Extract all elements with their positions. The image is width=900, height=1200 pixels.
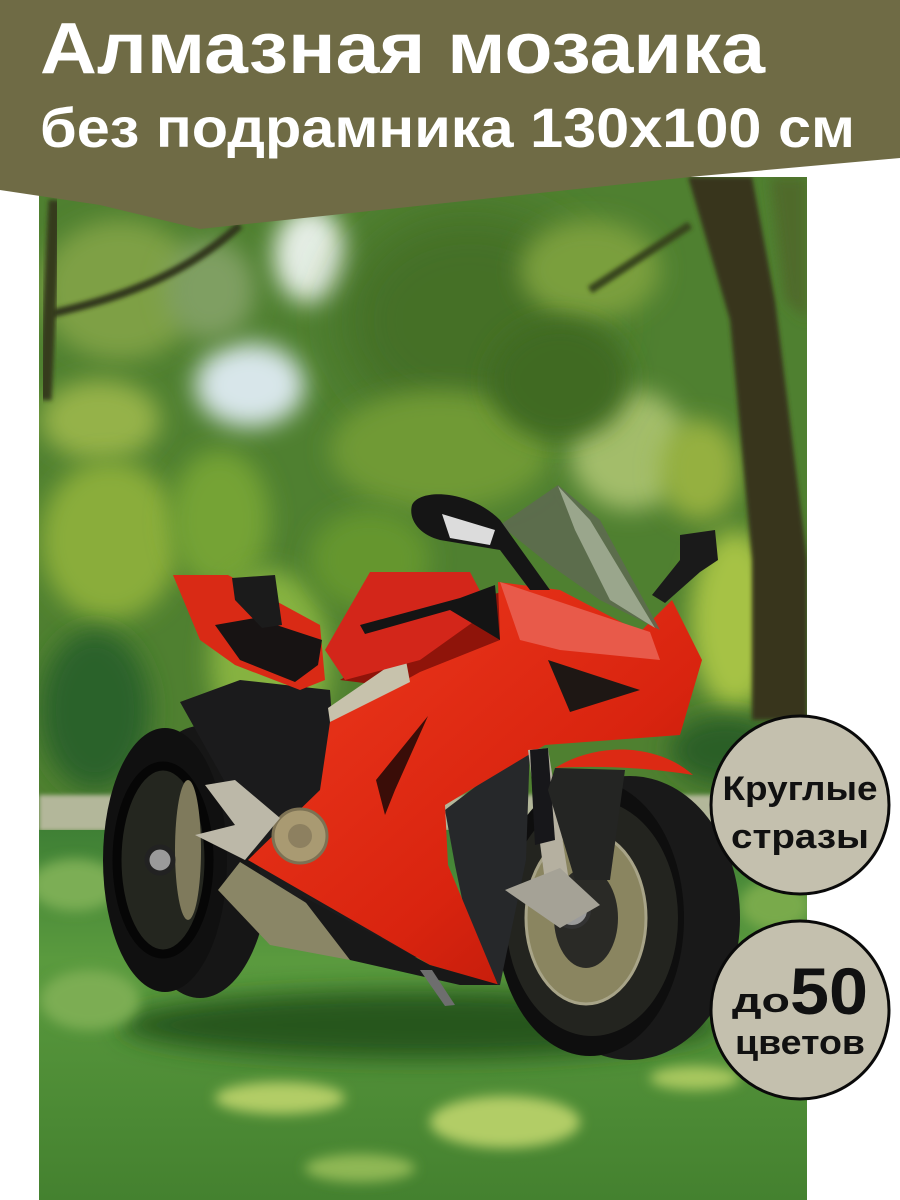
front wheel xyxy=(496,776,740,1060)
seat xyxy=(215,618,322,682)
fairing body xyxy=(248,582,702,985)
title: Алмазная мозаика xyxy=(40,9,766,89)
path and grass xyxy=(30,795,810,1200)
left mirror xyxy=(411,494,550,590)
badge: round rhinestones: Круглые xyxy=(722,770,878,808)
tree trunk and branches xyxy=(45,177,807,720)
badge: round rhinestones xyxy=(711,716,889,894)
cream side panel xyxy=(328,664,410,722)
rear dark hugger and engine xyxy=(180,680,430,960)
panel: photo of red motorcycle on grass xyxy=(30,177,810,1200)
tank xyxy=(325,572,490,680)
swingarm and footpeg silver xyxy=(195,780,280,860)
upper highlight xyxy=(500,582,660,660)
kickstand xyxy=(420,970,455,1006)
subtitle: без подрамника 130х100 см xyxy=(40,96,855,159)
windscreen xyxy=(500,485,660,630)
clutch cover xyxy=(273,809,327,863)
tail section xyxy=(173,575,325,690)
air vent xyxy=(548,660,640,712)
badge: up to 50 colours: 50 xyxy=(790,954,868,1028)
dark frame behind tank xyxy=(340,592,500,683)
exhaust xyxy=(218,862,350,960)
motorcycle xyxy=(103,485,740,1060)
badge: up to 50 colours xyxy=(711,921,889,1099)
badge: up to 50 colours: цветов xyxy=(735,1024,865,1062)
right mirror xyxy=(652,530,718,603)
banner xyxy=(0,0,900,229)
fork and front fender xyxy=(505,748,693,928)
badge: round rhinestones: стразы xyxy=(731,818,869,856)
rear wheel xyxy=(103,726,270,998)
handlebar xyxy=(360,585,500,640)
badge: up to 50 colours: до xyxy=(732,982,790,1020)
brake disc xyxy=(526,832,646,1004)
background foliage xyxy=(39,177,807,830)
radiator xyxy=(445,745,530,985)
